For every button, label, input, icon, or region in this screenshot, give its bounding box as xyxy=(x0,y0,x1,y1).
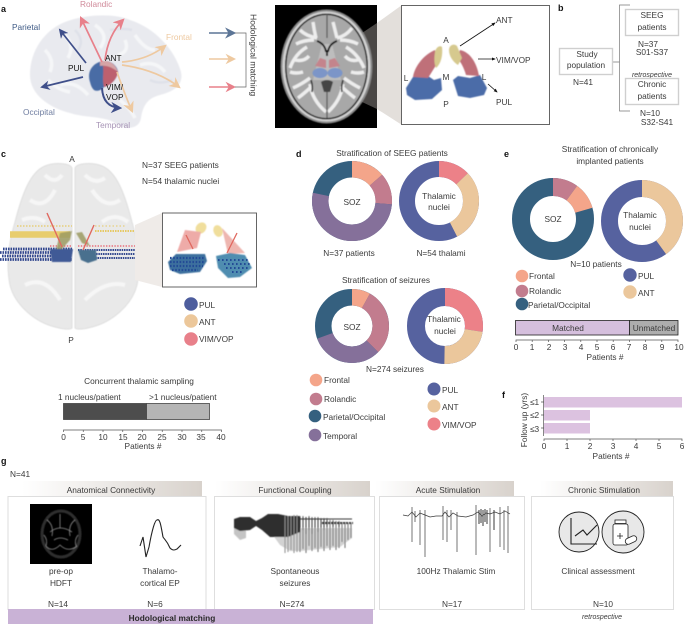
legend c: VIM/VOP xyxy=(199,334,234,344)
concurrent sampling bar chart: 1 nucleus/patient xyxy=(58,392,121,402)
thalamus inset: L xyxy=(404,73,409,83)
matched bar chart: 9 xyxy=(660,342,665,352)
column: acute stimulation: N=17 xyxy=(442,599,462,609)
zoom wedge xyxy=(377,5,402,125)
thalamus inset: A xyxy=(443,35,449,45)
donut: SEEG thalamic xyxy=(407,169,471,233)
chronic box xyxy=(626,78,678,127)
follow up bars: 1 xyxy=(565,441,570,451)
column: anatomical connectivity: N=14 xyxy=(48,599,68,609)
panel g: multimodal workflow xyxy=(1,456,674,624)
study population box: N=41 xyxy=(573,77,593,87)
N total: N=41 xyxy=(10,469,30,479)
concurrent sampling bar chart: >1 nucleus/patient xyxy=(149,392,217,402)
follow up bars: 2 xyxy=(588,441,593,451)
column: anatomical connectivity: N=6 xyxy=(147,599,163,609)
bracket xyxy=(613,5,630,111)
electrode tracks xyxy=(0,226,140,260)
SOZ legend d xyxy=(309,374,385,441)
matched bar chart: 2 xyxy=(547,342,552,352)
follow up bars: 0 xyxy=(542,441,547,451)
matching arrows and bracket xyxy=(209,33,246,87)
chronic title: Stratification of chronically xyxy=(562,144,659,154)
retrospective note chronic: retrospective xyxy=(582,614,622,621)
thalamus inset: M xyxy=(443,72,450,82)
concurrent sampling bar chart: 20 xyxy=(137,432,147,442)
column: anatomical connectivity: Thalamo- xyxy=(142,566,178,576)
region labels: PUL xyxy=(68,63,85,73)
concurrent sampling bar chart xyxy=(58,392,226,451)
donut: SEEG SOZ xyxy=(320,169,384,233)
region labels: VOP xyxy=(106,92,124,102)
matched bar chart: 5 xyxy=(595,342,600,352)
nuclei legend d xyxy=(428,382,477,430)
concurrent sampling bar chart: Patients # xyxy=(125,441,162,451)
seizures N: N=274 seizures xyxy=(366,364,424,374)
chronic title xyxy=(562,144,659,166)
thalamus inset xyxy=(402,6,550,124)
panel letter c: c xyxy=(1,149,6,159)
thalamic label chronic xyxy=(623,210,657,232)
matched bar chart: Matched xyxy=(552,323,584,333)
study population box xyxy=(560,48,612,87)
SEEG N thalami: N=54 thalami xyxy=(416,248,466,258)
SOZ legend d: Rolandic xyxy=(324,394,356,404)
concurrent sampling bar chart: 40 xyxy=(216,432,226,442)
follow up bars: ≤3 xyxy=(530,424,540,434)
SOZ legend e xyxy=(516,270,590,310)
SEEG box: N=37 xyxy=(638,39,658,49)
thalamic nuclei label: nuclei xyxy=(428,202,450,212)
matched bar chart: 7 xyxy=(627,342,632,352)
region labels: VIM/ xyxy=(106,82,124,92)
inset electrodes xyxy=(162,213,256,287)
hodological matching bar xyxy=(8,609,373,624)
thalami in brain xyxy=(50,231,97,263)
SEEG title: Stratification of SEEG patients xyxy=(336,148,448,158)
SEEG box: S01-S37 xyxy=(636,47,669,57)
top view brain xyxy=(0,164,140,329)
panel letter a: a xyxy=(1,4,7,14)
panel a: thalamocortical pathways xyxy=(1,0,550,130)
nuclei legend d: ANT xyxy=(442,402,459,412)
thalamus inset: VIM/VOP xyxy=(496,55,531,65)
nuclei legend e xyxy=(623,268,655,299)
retrospective note: retrospective xyxy=(632,72,672,79)
chronic box: patients xyxy=(637,91,667,101)
SEEG box: SEEG xyxy=(640,10,664,20)
thalamus inset: PUL xyxy=(496,97,513,107)
matched bar chart: 4 xyxy=(579,342,584,352)
nuclei legend d: VIM/VOP xyxy=(442,420,477,430)
matched bar chart xyxy=(514,320,684,362)
stim trace xyxy=(403,505,510,557)
matched bar chart: 3 xyxy=(563,342,568,352)
thalamic label chronic: Thalamic xyxy=(623,210,657,220)
column: acute stimulation xyxy=(375,481,524,610)
legend c xyxy=(184,297,234,346)
HDFT image xyxy=(30,504,92,564)
thalamic label chronic: nuclei xyxy=(629,222,651,232)
SEEG N patients: N=37 patients xyxy=(323,248,375,258)
column: functional coupling: Spontaneous xyxy=(271,566,319,576)
seizures title: Stratification of seizures xyxy=(342,275,430,285)
matched bar chart: 8 xyxy=(643,342,648,352)
seizure trace xyxy=(234,514,353,553)
thalamus inset: P xyxy=(443,99,449,109)
zoom wedge xyxy=(135,213,162,287)
SOZ legend d: Temporal xyxy=(323,431,357,441)
donut: seizures SOZ xyxy=(323,297,381,355)
donut: chronic thalamic xyxy=(610,188,674,254)
MRI axial slice xyxy=(275,5,377,128)
pathway arrows xyxy=(42,18,179,111)
chronic box: S32-S41 xyxy=(641,117,674,127)
chronic title: implanted patients xyxy=(576,156,644,166)
panel letter b: b xyxy=(558,3,564,13)
SOZ legend e: Rolandic xyxy=(529,286,561,296)
column: acute stimulation: 100Hz Thalamic Stim xyxy=(417,566,495,576)
concurrent sampling bar chart: 10 xyxy=(98,432,108,442)
column: anatomical connectivity: pre-op xyxy=(49,566,73,576)
follow up bars: ≤1 xyxy=(530,397,540,407)
column: functional coupling: seizures xyxy=(280,578,310,588)
concurrent sampling bar chart: 30 xyxy=(177,432,187,442)
SEEG box: patients xyxy=(637,22,667,32)
thalamic label seizures: nuclei xyxy=(434,326,456,336)
concurrent sampling bar chart: 25 xyxy=(157,432,167,442)
thalamus 3D xyxy=(89,61,118,91)
SOZ legend e: Frontal xyxy=(529,271,555,281)
SOZ label: SOZ xyxy=(343,197,361,207)
thalamic nuclei label: Thalamic xyxy=(422,191,456,201)
concurrent sampling bar chart: 35 xyxy=(196,432,206,442)
SOZ legend d: Frontal xyxy=(324,375,350,385)
nuclei legend e: PUL xyxy=(638,271,655,281)
panel letter e: e xyxy=(504,149,509,159)
panel letter f: f xyxy=(502,390,506,400)
SOZ legend d: Parietal/Occipital xyxy=(323,412,385,422)
column: anatomical connectivity: cortical EP xyxy=(140,578,180,588)
donut: chronic SOZ xyxy=(521,187,585,251)
chronic N: N=10 patients xyxy=(570,259,622,269)
panel letter g: g xyxy=(1,456,6,466)
matched bar chart: 1 xyxy=(530,342,535,352)
column: chronic stimulation: Chronic Stimulation xyxy=(568,485,640,495)
icon: medication circle xyxy=(602,511,644,553)
matched bar chart: 6 xyxy=(611,342,616,352)
electrodes red xyxy=(47,213,94,250)
top view P label: P xyxy=(68,335,74,345)
region labels: Frontal xyxy=(166,32,192,42)
column: functional coupling: Functional Coupling xyxy=(258,485,332,495)
legend c: ANT xyxy=(199,317,216,327)
legend c: PUL xyxy=(199,300,216,310)
SOZ label seizures: SOZ xyxy=(343,322,361,332)
donut: seizures thalamic xyxy=(416,297,474,355)
icon: chart circle xyxy=(559,512,599,552)
nuclei legend d: PUL xyxy=(442,385,459,395)
concurrent sampling bar chart: 5 xyxy=(81,432,86,442)
study population box: Study xyxy=(576,49,598,59)
region labels: Temporal xyxy=(96,120,130,130)
SOZ label chronic: SOZ xyxy=(544,214,562,224)
concurrent sampling bar chart: 15 xyxy=(118,432,128,442)
column: acute stimulation: Acute Stimulation xyxy=(416,485,481,495)
region labels: ANT xyxy=(105,53,122,63)
column: anatomical connectivity: HDFT xyxy=(50,578,72,588)
follow up bars xyxy=(530,395,685,461)
column: chronic stimulation: Clinical assessment xyxy=(561,566,635,576)
panel letter d: d xyxy=(296,149,302,159)
thalamus inset: ANT xyxy=(496,15,513,25)
column: functional coupling: N=274 xyxy=(280,599,305,609)
panel b: study population flow xyxy=(558,3,678,127)
region labels: Parietal xyxy=(12,22,40,32)
follow up bars: Patients # xyxy=(593,451,630,461)
thalamic nuclei label xyxy=(422,191,456,212)
follow up bars: 6 xyxy=(680,441,685,451)
region labels: Occipital xyxy=(23,107,55,117)
chronic box: N=10 xyxy=(640,108,660,118)
SEEG patient counts: N=37 SEEG patients xyxy=(142,160,219,170)
thalamic label seizures xyxy=(427,314,461,336)
panel e: chronic patients xyxy=(504,144,684,362)
region labels xyxy=(12,0,192,130)
SEEG box xyxy=(626,10,678,57)
SOZ legend e: Parietal/Occipital xyxy=(528,300,590,310)
column: anatomical connectivity: Anatomical Connectivity xyxy=(67,485,156,495)
concurrent sampling bar chart: 0 xyxy=(61,432,66,442)
lateral brain xyxy=(30,15,181,128)
hodological matching bar: Hodological matching xyxy=(129,613,215,623)
panel f: follow up xyxy=(502,390,685,461)
nuclei legend e: ANT xyxy=(638,288,655,298)
column: chronic stimulation: N=10 xyxy=(593,599,613,609)
concurrent sampling title: Concurrent thalamic sampling xyxy=(84,376,194,386)
panel d: stratification donuts xyxy=(296,148,477,441)
hodological matching label: Hodological matching xyxy=(248,14,258,96)
top view A label: A xyxy=(69,154,75,164)
thalamus inset: L xyxy=(482,72,487,82)
column: chronic stimulation xyxy=(532,481,674,610)
matched bar chart: 0 xyxy=(514,342,519,352)
thalamic nuclei count: N=54 thalamic nuclei xyxy=(142,176,219,186)
matched bar chart: Unmatched xyxy=(633,323,676,333)
y axis title: Follow up (yrs) xyxy=(519,393,529,447)
study population box: population xyxy=(567,60,606,70)
follow up bars: 5 xyxy=(657,441,662,451)
thalamic label seizures: Thalamic xyxy=(427,314,461,324)
evoked potential trace xyxy=(140,520,181,557)
chronic box: Chronic xyxy=(638,79,666,89)
follow up bars: 4 xyxy=(634,441,639,451)
panel c: electrode coverage xyxy=(0,149,256,451)
follow up bars: 3 xyxy=(611,441,616,451)
matched bar chart: Patients # xyxy=(587,352,624,362)
column: anatomical connectivity xyxy=(8,481,206,610)
follow up bars: ≤2 xyxy=(530,410,540,420)
matched bar chart: 10 xyxy=(674,342,684,352)
column: functional coupling xyxy=(214,481,374,610)
